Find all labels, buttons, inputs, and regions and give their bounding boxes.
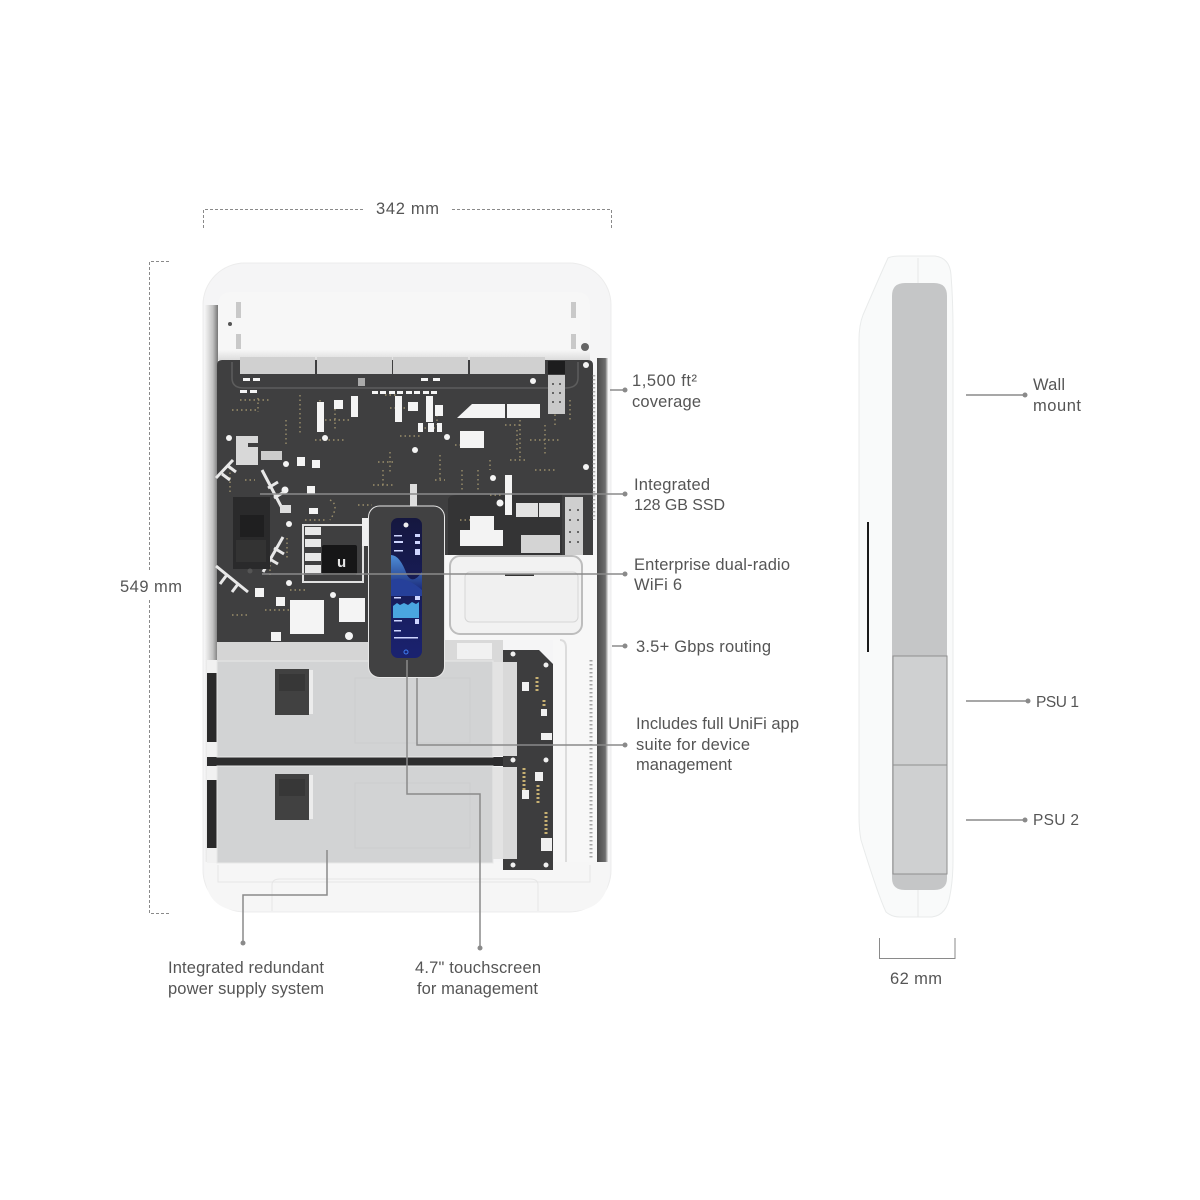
depth dimension: 62 mm [890, 970, 942, 988]
label: wall mount [1033, 376, 1081, 415]
right inner edge [597, 358, 608, 865]
label: routing: 3.5+ Gbps routing [636, 638, 771, 656]
label: power supply: power supply system [168, 980, 324, 998]
main circuit board [216, 360, 593, 642]
label: wifi: Enterprise dual-radio [634, 556, 790, 574]
light strip under board [217, 642, 368, 662]
bottom shell [205, 862, 609, 911]
label: app suite: management [636, 756, 732, 774]
psu 2 door [893, 765, 947, 874]
shielded module with logo: u [337, 554, 346, 571]
label: psu 1: PSU 1 [1036, 694, 1079, 711]
enclosure shell [203, 263, 611, 912]
label: app suite: suite for device [636, 736, 750, 754]
width dimension [204, 200, 612, 228]
label: wifi: WiFi 6 [634, 576, 682, 594]
device front view [203, 263, 611, 912]
power supply bay gap [207, 757, 507, 766]
label: psu 2: PSU 2 [1033, 812, 1079, 829]
board chips and pads [236, 378, 560, 641]
label: ssd: 128 GB SSD [634, 497, 725, 514]
lower right tray [445, 375, 597, 870]
label: app suite: Includes full UniFi app [636, 715, 799, 733]
label: ssd [634, 476, 725, 514]
touchscreen unit [368, 506, 444, 678]
label: power supply [168, 959, 324, 998]
psu 1 door [893, 656, 947, 765]
side shell [859, 256, 953, 917]
antenna brackets [216, 460, 291, 592]
height dimension: 549 mm [120, 578, 182, 596]
callout dots [240, 388, 1030, 950]
slot [867, 522, 869, 652]
m.2 ssd module [233, 497, 270, 574]
network ports [240, 357, 545, 374]
top sfp port [548, 361, 565, 414]
label: wall mount: mount [1033, 397, 1081, 415]
label: power supply: Integrated redundant [168, 959, 324, 977]
label: coverage: 1,500 ft² [632, 372, 698, 390]
label: coverage [632, 372, 701, 411]
top tray [218, 292, 590, 360]
sfp cage [565, 497, 583, 555]
label: ssd: Integrated [634, 476, 710, 494]
side circuit board [503, 650, 553, 870]
label: touchscreen [415, 959, 541, 998]
label: touchscreen: for management [417, 980, 538, 998]
label: app suite [636, 715, 799, 774]
power supply 1 [217, 661, 493, 757]
left inner edge [205, 305, 218, 865]
width dimension: 342 mm [376, 200, 439, 218]
label: wall mount: Wall [1033, 376, 1065, 394]
psu side vents [207, 660, 217, 863]
height dimension [120, 262, 182, 914]
shielded module with logo [303, 518, 368, 582]
callout lines [243, 390, 1028, 948]
depth dimension [880, 938, 955, 988]
label: coverage: coverage [632, 393, 701, 411]
device side view [859, 256, 953, 917]
power supply 2 [217, 766, 493, 863]
psu connectors [493, 662, 517, 859]
label: touchscreen: 4.7" touchscreen [415, 959, 541, 977]
gray panel [892, 283, 947, 890]
label: wifi [634, 556, 790, 594]
display [391, 518, 422, 658]
white connector housing [460, 516, 503, 546]
